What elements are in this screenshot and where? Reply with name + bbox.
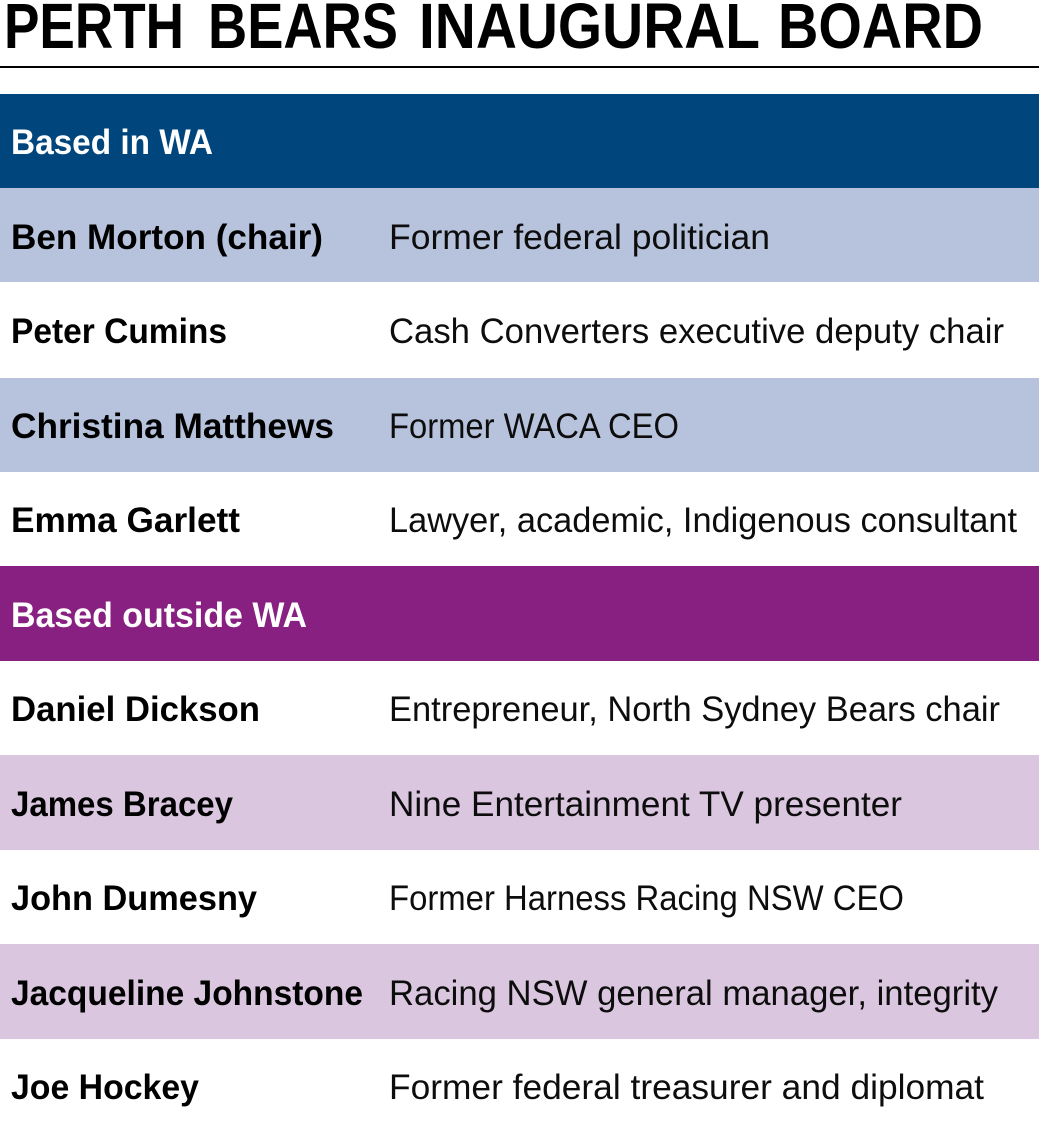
row: John Dumesny: John Dumesny bbox=[11, 879, 258, 918]
row: Christina Matthews: Christina Matthews bbox=[11, 407, 334, 446]
row: Peter Cumins: Cash Converters executive deputy chair bbox=[389, 312, 1004, 351]
row: Daniel Dickson bbox=[0, 661, 1039, 755]
row: Ben Morton bbox=[0, 188, 1039, 282]
row: James Bracey bbox=[0, 755, 1039, 850]
row: Christina Matthews bbox=[0, 378, 1039, 472]
row: John Dumesny bbox=[0, 850, 1039, 944]
row: Emma Garlett: Lawyer, academic, Indigenous consultant bbox=[389, 501, 1017, 540]
row: Emma Garlett bbox=[0, 472, 1039, 566]
title bbox=[4, 0, 983, 62]
row: Peter Cumins bbox=[0, 282, 1039, 378]
heading: based in WA: Based in WA bbox=[11, 123, 213, 162]
row: Peter Cumins: Peter Cumins bbox=[11, 312, 227, 351]
row: Jacqueline Johnstone: Jacqueline Johnstone bbox=[11, 974, 363, 1013]
row: John Dumesny: Former Harness Racing NSW CEO bbox=[389, 879, 904, 918]
heading: based outside WA bbox=[0, 566, 1039, 661]
row: Daniel Dickson: Entrepreneur, North Sydney Bears chair bbox=[389, 690, 1000, 729]
row: James Bracey: James Bracey bbox=[11, 785, 233, 824]
row: Ben Morton: Former federal politician bbox=[389, 218, 770, 257]
row: Daniel Dickson: Daniel Dickson bbox=[11, 690, 260, 729]
row: Joe Hockey: Former federal treasurer and diplomat bbox=[389, 1068, 984, 1107]
heading: based outside WA: Based outside WA bbox=[11, 596, 307, 635]
row: James Bracey: Nine Entertainment TV presenter bbox=[389, 785, 902, 824]
row: Joe Hockey bbox=[0, 1039, 1039, 1134]
row: Joe Hockey: Joe Hockey bbox=[11, 1068, 200, 1107]
row: Emma Garlett: Emma Garlett bbox=[11, 501, 240, 540]
row: Jacqueline Johnstone bbox=[0, 944, 1039, 1039]
panel: based outside WA bbox=[0, 566, 1039, 1134]
row: Christina Matthews: Former WACA CEO bbox=[389, 407, 679, 446]
row: Jacqueline Johnstone: Racing NSW general manager, integrity bbox=[389, 974, 998, 1013]
heading: based in WA bbox=[0, 94, 1039, 188]
row: Ben Morton: Ben Morton (chair) bbox=[11, 218, 323, 257]
panel: based in WA bbox=[0, 94, 1039, 566]
